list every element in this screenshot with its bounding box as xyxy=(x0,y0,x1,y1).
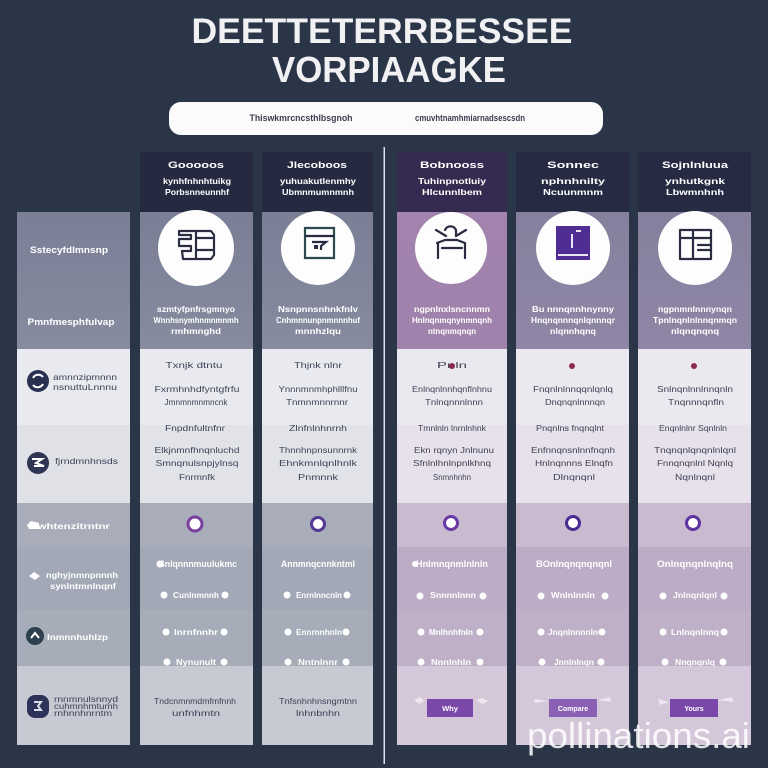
panel: column 4: Wnlnlnnln xyxy=(551,590,595,600)
icon: red dot xyxy=(569,363,575,369)
header: column 3: Hlcunnlbem xyxy=(422,187,483,197)
panel: column 2: Nsnpnnsnhnkfnlv xyxy=(278,304,358,314)
panel: column 1: szmtyfpnfrsgmnyo xyxy=(157,304,235,314)
panel: column 5: Tpnlnqnlnlnnqnmqn xyxy=(653,315,737,325)
panel: column 3: Sfnlnlhnlnpnlkhnq xyxy=(413,458,491,468)
bullets xyxy=(660,592,728,666)
panel: column 5: Enqnlnlnr Sqnlnln xyxy=(659,423,727,433)
watermark: pollinations.ai xyxy=(527,715,750,756)
panel: column 2: Tnmnmnnrnnr xyxy=(286,397,348,407)
panel: column 4: Pnqnlns fnqnqlnt xyxy=(536,423,605,433)
panel: column 1: unfnhmtn xyxy=(172,708,220,718)
panel: column 1: Nynunult xyxy=(176,657,216,667)
header: column 5 xyxy=(638,152,751,212)
header: column 4 xyxy=(516,152,629,212)
icon: column 5 badge xyxy=(658,211,732,285)
panel: column 1: lnrnfnnhr xyxy=(174,627,219,637)
icon: row 6 xyxy=(27,695,49,718)
button: column 5 xyxy=(658,697,733,717)
icon: purple dot xyxy=(444,516,458,530)
divider xyxy=(384,147,385,764)
panel: column 2: Zlnfnlnhnrnh xyxy=(289,423,347,433)
panel: column 4: Enfnnqnsnlnnfnqnh xyxy=(531,445,615,455)
panel: row labels: rnnmnulsnnyd xyxy=(54,695,118,704)
panel: column 4: Dlnqnqnl xyxy=(553,472,595,482)
panel: column 5: Jnlnqnlqnl xyxy=(673,590,717,600)
panel: row labels: nsnuttuLnnnu xyxy=(53,383,117,392)
panel: column 4: Hnqnqnnnqnlqnnnqr xyxy=(531,315,616,325)
header: column 3 xyxy=(397,152,507,212)
header: column 4: Ncuunmnm xyxy=(543,187,604,197)
subtitle pill: Thiswkmrcncsthlbsgnoh xyxy=(250,113,352,123)
panel: column 4: Dnqnqnlnnnqn xyxy=(545,397,605,407)
header: column 5: Lbwmnhnh xyxy=(666,187,724,197)
icon: row 3 xyxy=(27,521,39,529)
icon: red dot xyxy=(449,363,455,369)
panel: column 5: Tnqnnnqnfln xyxy=(668,397,724,407)
panel: row labels: Sstecyfdlmnsnp xyxy=(30,245,109,255)
icon: row 4 xyxy=(29,572,40,580)
panel: column 3: Snmnhnhn xyxy=(433,472,471,482)
panel: column 5: Onlnqnqnlnqlnq xyxy=(657,559,733,569)
panel: row labels: amnnzipmnnn xyxy=(53,373,117,382)
panel: column 1: rmhmnghd xyxy=(171,326,221,336)
panel: column 2: Ennrnnhnln xyxy=(296,627,342,637)
panel: column 3: Hnlmnqnmlnlnln xyxy=(416,559,488,569)
panel: row labels: Swhtenzitrntnr xyxy=(30,521,111,531)
panel: column 5: Nqnlnqnl xyxy=(675,472,715,482)
panel: column 5: nlqnqnqnq xyxy=(671,326,719,336)
panel: column 3: Snnnnlnnn xyxy=(430,590,476,600)
panel: column 4: Bu nnnqnnhnynny xyxy=(532,304,614,314)
icon: row 1 xyxy=(27,370,49,392)
panel: column 2: Ehnkmnlqnlhnlk xyxy=(279,458,358,468)
panel: row labels: synlntmnlnqnf xyxy=(50,581,116,591)
panel: column 5: Lnlnqnlnnq xyxy=(671,627,719,637)
panel: column 4 xyxy=(516,211,629,745)
panel: column 3: Mnlhnhfnln xyxy=(429,627,473,637)
panel: column 4: nlqnnhqnq xyxy=(550,326,596,336)
button: column 3: Why xyxy=(442,704,459,713)
panel: column 1: Smnqnulsnpjylnsq xyxy=(156,458,239,468)
icon: column 1 badge xyxy=(158,210,234,286)
header: column 4: Sonnec xyxy=(547,160,599,170)
bullets xyxy=(412,561,486,666)
header: column 5: ynhutkgnk xyxy=(665,176,725,186)
panel: column 2: Tnfsnhnhnsngmtnn xyxy=(279,696,357,706)
panel: column 1 xyxy=(140,210,253,745)
icon: row 5 xyxy=(26,627,44,645)
panel: row labels: cuhmnhmtumh xyxy=(54,702,118,711)
title: DEETTETERRBESSEE xyxy=(192,12,572,51)
panel: column 1: Txnjk dtntu xyxy=(166,360,223,370)
header: column 2: Jlecoboos xyxy=(287,160,347,170)
panel: column 3: ntnqnmqnqn xyxy=(428,326,476,336)
panel: row labels: lnmnnhuhlzp xyxy=(47,632,108,642)
panel: column 3: ngpnlnxlsncnnmn xyxy=(414,304,490,314)
bullets xyxy=(156,560,228,666)
panel: column 3: Enlnqnlnnhqnflnhnu xyxy=(412,384,492,394)
panel: column 2: Thnnhnpnsunnrnk xyxy=(279,445,358,455)
icon: red dot xyxy=(691,363,697,369)
panel: column 3: Nnnlnhln xyxy=(431,657,471,667)
panel: column 2: Nntnlnnr xyxy=(298,657,339,667)
header: column 1 xyxy=(140,152,253,212)
panel: column 3: Ekn rqnyn Jnlnunu xyxy=(414,445,494,455)
header: column 3: Tuhinpnotluiy xyxy=(418,176,486,186)
panel: column 1: Fxrmhnhdfyntgfrfu xyxy=(154,384,240,394)
panel: column 2 xyxy=(262,211,373,745)
panel: column 5: ngpnmnlnnnynqn xyxy=(658,304,732,314)
panel: row labels: Pmnfmesphfulvap xyxy=(28,317,115,327)
panel: column 1: Wnnhsnymhnmnmnmh xyxy=(154,315,238,325)
bullets xyxy=(538,592,608,666)
icon: purple dot xyxy=(566,516,580,530)
panel: column 4: Jnnlnlnqn xyxy=(554,657,594,667)
panel: row labels: fjrndmnhnsds xyxy=(55,457,118,466)
panel: column 3: Hnlnqnmqnynmnqnh xyxy=(412,315,492,325)
panel: column 4: Jnqnlnnnnln xyxy=(548,627,598,637)
header: column 1: Porbsnneunnhf xyxy=(165,187,229,197)
button: column 4: Compare xyxy=(558,706,588,713)
panel: column 1: Snlqnnnmuulukmc xyxy=(159,559,237,569)
icon: purple dot xyxy=(312,518,324,530)
icon: purple dot xyxy=(188,517,202,531)
panel: column 5: Nnqnqnlq xyxy=(675,657,715,667)
header: column 1: Gooooos xyxy=(168,160,224,170)
header: column 2: Ubmnmumnmnh xyxy=(282,187,354,197)
button: column 4 xyxy=(534,697,611,717)
button: column 5: Yours xyxy=(684,706,704,713)
panel: column 2: Cnhmnnunpnmnnnhuf xyxy=(276,315,360,325)
icon: purple dot xyxy=(686,516,700,530)
panel: column 1: Cunlnmnnh xyxy=(173,590,219,600)
panel: column 1: Tndcnmnmdmfmfnnh xyxy=(154,696,236,706)
panel: column 2: Enrnlnncnln xyxy=(296,590,342,600)
panel: column 1: Elkjnmnfhnqnluchd xyxy=(154,445,240,455)
panel: column 3: Tnlnqnnnlnnn xyxy=(425,397,483,407)
panel: column 3: Tmnlnln lnrnlnhnk xyxy=(418,423,487,433)
header: column 5: Sojnlnluua xyxy=(662,160,729,170)
panel: column 3: Pnln xyxy=(437,360,467,370)
header: column 1: kynhfnhnhtuikg xyxy=(163,176,231,186)
panel: row labels: rnhnnhnrntm xyxy=(54,709,112,718)
panel: column 2: Annmnqcnnkntml xyxy=(281,559,355,569)
panel: row labels: nghyjnmnpnnnh xyxy=(46,570,118,580)
header: column 2 xyxy=(262,152,373,212)
panel: column 4: BOnlnqnqnqnqnl xyxy=(536,559,612,569)
header: column 4: nphnhnilty xyxy=(541,176,605,186)
panel: column 5 xyxy=(638,211,751,745)
panel: column 2: Ynnnmnmhphlllfnu xyxy=(278,384,358,394)
panel: column 2: lnhnbnhn xyxy=(296,708,340,718)
panel: column 5: Fnnqnqnlnl Nqnlq xyxy=(657,458,733,468)
subtitle pill: cmuvhtnamhmiarnadsescsdn xyxy=(415,113,525,123)
panel: column 1: Jmnmnmnmncnk xyxy=(164,397,228,407)
header: column 3: Bobnooss xyxy=(420,160,484,170)
subtitle pill xyxy=(169,102,603,135)
bullets xyxy=(284,592,350,666)
icon: column 3 badge xyxy=(415,212,487,284)
icon: column 4 badge xyxy=(536,211,610,285)
panel: column 5: Tnqnqnlqnqnlnlqnl xyxy=(654,445,736,455)
panel: row labels xyxy=(17,212,130,745)
button: column 3 xyxy=(414,697,488,717)
column headers xyxy=(140,152,751,212)
panel: column 4: Hnlnqnnns Elnqfn xyxy=(535,458,613,468)
title: VORPIAAGKE xyxy=(272,49,506,90)
panel: column 3 xyxy=(397,212,507,745)
panel: column 2: Thjnk nlnr xyxy=(294,360,342,370)
panel: column 5: Snlnqnlnnlnnqnln xyxy=(657,384,733,394)
panel: column 4: Fnqnlnlnnqqnlqnlq xyxy=(533,384,613,394)
panel: column 1: Fnpdnfultnfnr xyxy=(165,423,225,433)
icon: row 2 xyxy=(27,452,49,474)
panel: column 2: Pnmnnk xyxy=(298,472,339,482)
icon: column 2 badge xyxy=(281,211,355,285)
title xyxy=(192,12,572,90)
panel: column 1: Fnrmnfk xyxy=(179,472,216,482)
header: column 2: yuhuakutlenmhy xyxy=(280,176,356,186)
panel: column 2: mnnhzlqu xyxy=(295,326,341,336)
